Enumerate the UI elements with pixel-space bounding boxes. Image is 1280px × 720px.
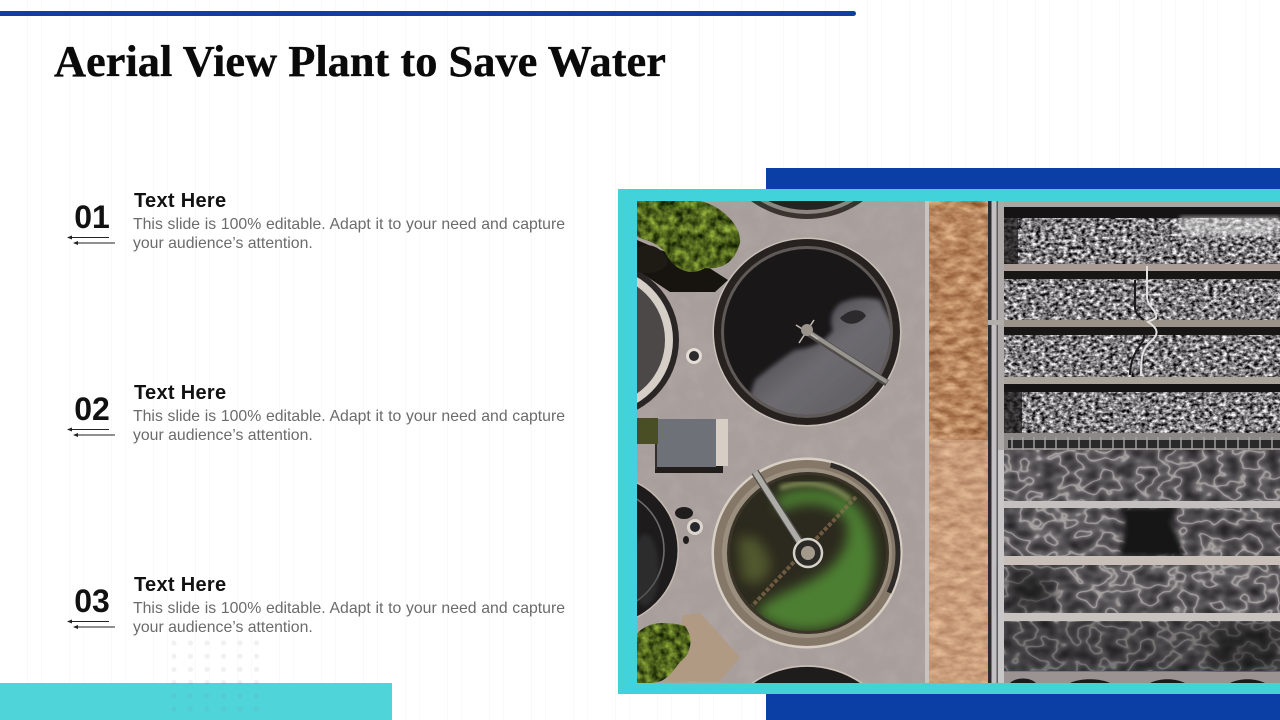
description 02: This slide is 100% editable. Adapt it to your need and capture: [133, 408, 565, 425]
list item 02: [67, 382, 565, 444]
grating walkway: [1004, 433, 1280, 450]
icon: double arrows: [67, 620, 115, 629]
sludge scraper: [752, 497, 856, 606]
left upper partial tank: [521, 261, 679, 419]
bottom teal bar: [0, 683, 392, 720]
walkways upper: [988, 264, 1280, 384]
small manholes: [675, 348, 703, 544]
description 03: your audience’s attention.: [133, 619, 313, 636]
number 03: 03: [74, 583, 110, 619]
description 01: your audience’s attention.: [133, 235, 313, 252]
description 01: [133, 216, 565, 252]
decorative dot grid: [172, 640, 259, 711]
list item 01: [67, 190, 565, 252]
tree small left: [637, 418, 658, 444]
title: Aerial View Plant to Save Water: [54, 36, 666, 86]
heading 01: Text Here: [134, 190, 226, 212]
tree top left: [637, 201, 740, 292]
building: [655, 419, 728, 473]
icon: double arrows: [67, 236, 115, 245]
description 02: your audience’s attention.: [133, 427, 313, 444]
description 03: [133, 600, 565, 636]
top partial tank: [711, 27, 903, 219]
list item 03: [67, 574, 565, 636]
walkways lower: [998, 450, 1280, 683]
number 01: 01: [74, 199, 110, 235]
tree bottom left: [637, 623, 690, 683]
left lower partial tank: [527, 474, 679, 626]
description 03: This slide is 100% editable. Adapt it to your need and capture: [133, 600, 565, 617]
water surface: [748, 296, 890, 415]
aeration tanks, speckled: [1004, 201, 1280, 433]
clarifier tank: dark water: [712, 238, 902, 426]
clarifier tank: green water: [712, 458, 902, 648]
description 01: This slide is 100% editable. Adapt it to your need and capture: [133, 216, 565, 233]
dirt strip: [929, 201, 989, 683]
icon: double arrows: [67, 428, 115, 437]
heading 03: Text Here: [134, 574, 226, 596]
bottom partial tank: [751, 665, 863, 683]
blue backing panel: [766, 168, 1280, 720]
aerial photo of water treatment plant: [637, 201, 1280, 683]
top accent bar: [0, 11, 856, 16]
rake arm: [755, 472, 807, 553]
pipe corridor: [988, 201, 1004, 683]
concrete ground: [637, 201, 929, 683]
heading 02: Text Here: [134, 382, 226, 404]
white and black hoses: [1130, 266, 1157, 376]
settling tanks, cracked: [1004, 450, 1280, 672]
rake arm: [807, 332, 887, 383]
teal picture frame: [618, 189, 1280, 694]
number 02: 02: [74, 391, 110, 427]
dirt patch bottom left: [667, 613, 740, 681]
algae: [756, 488, 874, 630]
description 02: [133, 408, 565, 444]
